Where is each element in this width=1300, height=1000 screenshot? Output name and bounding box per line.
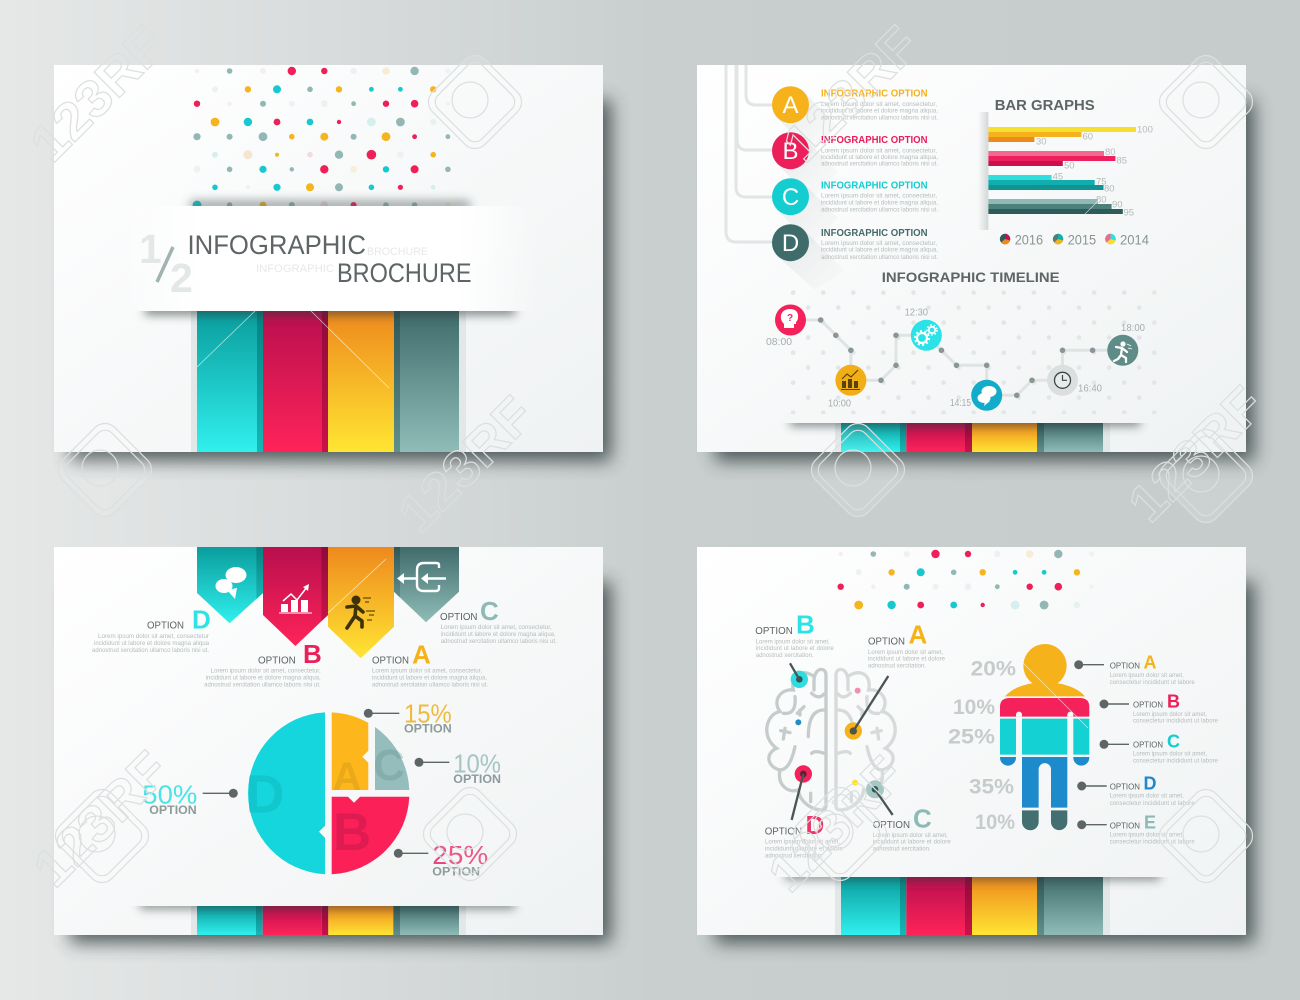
label: option A: A [412,640,431,670]
label: option D [92,605,211,654]
label: option C: adnostrud xercitation ullamco laboris nisi ut. [441,639,557,645]
body label: option C: OPTION [1133,739,1163,749]
callout: 50% [142,779,238,817]
label: option B: OPTION [258,655,296,667]
label: option D: D [192,605,211,635]
title: infographic brochure: BROCHURE [337,258,472,288]
human body chart [1000,644,1089,830]
connector lines [726,65,775,242]
callout: 50%: 50% [142,779,197,809]
body label: option B [1100,691,1219,725]
brain diagram [767,663,895,820]
brain label: option A [868,620,946,670]
option B: INFOGRAPHIC OPTION [821,135,928,146]
body label: option C: C [1167,731,1180,751]
marker C [866,780,893,815]
brain label: option C: incididunt ut labore et dolore [873,840,951,846]
title: infographic brochure [188,230,472,288]
body label: option B: Lorem ipsum dolor sit amet, [1133,712,1207,718]
bar chart: 90 [1112,200,1123,210]
option B: B [782,138,799,165]
body label: option A: consectetur incididunt ut labore [1110,680,1195,686]
percent labels: 35% [969,776,1014,799]
colour stripes [835,877,1110,935]
marker D [792,765,812,820]
brain label: option D: OPTION [765,826,802,838]
timeline: 18:00 [1121,323,1145,334]
brain label: option D: incididunt ut labore et dolore [765,847,844,853]
callout: 15%: OPTION [404,724,452,736]
brain label: option A: Lorem ipsum dolor sit amet, [868,650,943,656]
timeline: 16:40 [1078,384,1102,394]
callout: 10% [414,749,501,786]
body label: option E [1077,812,1195,845]
label: option A: Lorem ipsum dolor sit amet, consectetur, [372,668,482,674]
callout: 10%: 10% [453,749,501,779]
option A: INFOGRAPHIC OPTION [821,88,928,100]
marker A [845,676,888,740]
right hemisphere [836,669,895,810]
label: option A [372,640,488,688]
watermark overlay: 123RF [772,16,930,173]
icon: gears [911,320,942,351]
body label: option C: consectetur incididunt ut labore [1133,758,1219,764]
label: option C: incididunt ut labore et dolore magna aliqua, [441,632,556,638]
timeline: 08:00 [766,337,792,348]
brain label: option B: Lorem ipsum dolor sit amet, [756,640,830,646]
label: option A: adnostrud xercitation ullamco laboris nisi ut. [372,682,488,688]
fraction 1/2 [139,226,193,301]
label: option B [204,639,322,688]
body label: option D: Lorem ipsum dolor sit amet, [1110,794,1184,800]
bar chart: 95 [1124,208,1134,218]
label: option D: incididunt ut labore et dolore magna aliqua [94,641,210,647]
brain label: option C: Lorem ipsum dolor sit amet, [873,833,948,839]
pie chart: B [333,803,371,862]
option D: D [782,230,799,257]
watermark overlay: 123RF [387,386,545,543]
bar chart: 45 [1053,172,1063,182]
option B: incididunt ut labore et dolore magna aliqua, [821,155,938,161]
fraction 1/2: 1 [139,226,162,272]
callout: 15%: 15% [404,698,452,728]
label: option A: OPTION [372,655,409,667]
body label: option D: D [1144,774,1156,794]
brain label: option A: incididunt ut labore et dolore [868,656,946,662]
body label: option A: Lorem ipsum dolor sit amet, [1110,673,1184,679]
pennant: running person [328,547,394,658]
option B: Lorem ipsum dolor sit amet, consectetur, [821,148,937,154]
icon: growth chart [835,365,866,396]
label: option B: B [303,639,322,669]
icon: head with question mark: ? [787,313,793,324]
body label: option A [1074,652,1195,686]
option C: adnostrud xercitation ullamco laboris nisi ut. [821,207,938,213]
brain label: option B: OPTION [755,625,793,637]
percent labels: 25% [948,726,995,748]
label: option A: incididunt ut labore et dolore magna aliqua, [372,676,487,682]
brain label: option B: adnostrud xercitation. [756,653,814,659]
timeline: 10:00 [828,398,851,410]
option C: C [782,184,799,211]
icon: speech bubbles [971,380,1002,411]
bar chart legend: 2014 [1120,231,1149,247]
icon: head with question mark [775,304,806,336]
label: option C: C [480,596,499,626]
bar chart legend: 2016 [1015,231,1043,247]
icon: clock [1047,365,1078,396]
option D: incididunt ut labore et dolore magna aliqua, [821,248,938,254]
callout: 10%: OPTION [453,774,501,786]
brain label: option A: A [908,620,928,650]
brain label: option C: adnostrud xercitation. [873,847,931,853]
bar chart legend [1000,231,1149,247]
body label: option A: OPTION [1110,660,1140,670]
option D: INFOGRAPHIC OPTION [821,228,928,239]
body label: option D: OPTION [1110,782,1140,792]
callout: 25% [394,840,488,878]
brain label: option C [873,803,951,853]
watermark overlay: 123RF [19,16,177,173]
body label: option E: Lorem ipsum dolor sit amet, [1110,832,1184,838]
callout: 25%: 25% [432,840,488,870]
bar chart: 75 [1096,176,1107,188]
body label: option B: B [1167,691,1180,711]
bar chart: 80 [1096,194,1107,206]
option C [772,178,938,245]
bar chart: 80 [1105,147,1116,158]
fraction 1/2: 2 [170,255,193,301]
option A: incididunt ut labore et dolore magna aliqua, [821,109,938,115]
title band [120,206,540,311]
body label: option C [1100,731,1219,764]
pie chart [246,712,409,874]
timeline: 12:30 [905,308,928,318]
body label: option E: E [1144,812,1156,832]
body label: option D [1077,774,1195,807]
brain label: option B: incididunt ut labore et dolore [756,646,834,652]
brain label: option A: adnostrud xercitation. [868,664,926,670]
dot pattern [193,67,451,209]
brain label: option D [765,810,844,860]
brain label: option D: Lorem ipsum dolor sit amet, [765,840,840,846]
title: infographic brochure: INFOGRAPHIC [256,263,334,275]
watermark overlay: 123RF [757,746,915,903]
pie chart: A [333,755,361,799]
callout: 25%: OPTION [432,866,480,878]
percent labels: 20% [971,658,1016,681]
colour stripes [191,311,466,452]
body label: option B: consectetur incididunt ut labore [1133,719,1219,725]
label: option C [440,596,557,645]
pennant: arrow box [394,547,459,622]
brain label: option D: D [806,810,824,840]
option D: Lorem ipsum dolor sit amet, consectetur, [821,241,937,247]
bar chart: 80 [1104,184,1115,194]
brain label: option A: OPTION [868,635,905,647]
heading: bar graphs: BAR GRAPHS [995,97,1095,114]
option A: adnostrud xercitation ullamco laboris nisi ut. [821,115,938,121]
heading: infographic timeline: INFOGRAPHIC TIMELINE [882,269,1060,285]
colour stripes [191,906,466,935]
option B [772,132,938,199]
brain label: option B [755,609,834,659]
percent labels: 10% [953,696,995,719]
brain label: option C: OPTION [873,819,910,831]
option C: incididunt ut labore et dolore magna aliqua, [821,200,938,206]
panel: pennants and pie chart [54,547,603,935]
panel: cover page [54,65,603,452]
label: option D: OPTION [147,620,184,632]
dot pattern [838,550,1094,609]
option C: Lorem ipsum dolor sit amet, consectetur, [821,194,937,200]
callout: 50%: OPTION [149,805,197,817]
left hemisphere [767,669,826,810]
body label: option C: Lorem ipsum dolor sit amet, [1133,751,1207,757]
body label: option A: A [1144,652,1156,672]
option D [772,224,938,290]
bar chart: 30 [1036,136,1047,148]
colour stripes [835,423,1110,452]
watermark overlay: 123RF [1117,376,1275,533]
pennant: speech bubbles [197,547,263,623]
pie chart: D [246,764,284,824]
percent labels: 10% [975,811,1015,834]
marker B [790,663,808,688]
bar chart legend: 2015 [1068,231,1096,247]
callout: 15% [364,698,452,736]
label: option C: OPTION [440,611,478,623]
bar chart: 85 [1116,156,1127,166]
watermark overlay: 123RF [22,741,180,898]
timeline [766,304,1145,411]
body label: option E: OPTION [1110,820,1140,830]
pie chart: C [373,741,405,790]
label: option D: adnostrud xercitation ullamco laboris nisi ut. [92,648,209,654]
label: option D: Lorem ipsum dolor sit amet, consectetur [98,634,209,640]
panel: brain and human body [697,547,1246,935]
option A: A [782,92,799,119]
timeline: 14:15 [950,398,971,409]
bar chart [978,112,1153,230]
label: option B: Lorem ipsum dolor sit amet, consectetur, [211,668,321,674]
percent labels [948,658,1016,834]
brain label: option D: adnostrud xercitation. [765,854,823,860]
pennant: growth chart [263,547,328,646]
label: option B: incididunt ut labore et dolore magna aliqua, [206,676,321,682]
option D: adnostrud xercitation ullamco laboris nisi ut. [821,255,938,261]
bar chart: 50 [1064,160,1075,172]
option C: INFOGRAPHIC OPTION [821,180,928,191]
label: option B: adnostrud xercitation ullamco laboris nisi ut. [204,682,321,688]
body label: option D: consectetur incididunt ut labore [1110,801,1195,807]
brain label: option B: B [796,609,815,639]
bar chart: 60 [1082,132,1093,142]
option A [772,86,938,153]
title: infographic brochure: INFOGRAPHIC [188,230,366,260]
option A: Lorem ipsum dolor sit amet, consectetur, [821,102,937,108]
body label: option E: consectetur incididunt ut labore [1110,839,1195,845]
body label: option B: OPTION [1133,699,1163,709]
bar chart: 100 [1137,124,1153,136]
icon: running person [1107,335,1138,366]
title: infographic brochure: BROCHURE [367,246,428,258]
brain label: option C: C [913,803,932,833]
label: option C: Lorem ipsum dolor sit amet, consectetur, [441,625,552,631]
option B: adnostrud xercitation ullamco laboris nisi ut. [821,162,938,168]
panel: options and bar graphs and timeline [697,65,1246,452]
